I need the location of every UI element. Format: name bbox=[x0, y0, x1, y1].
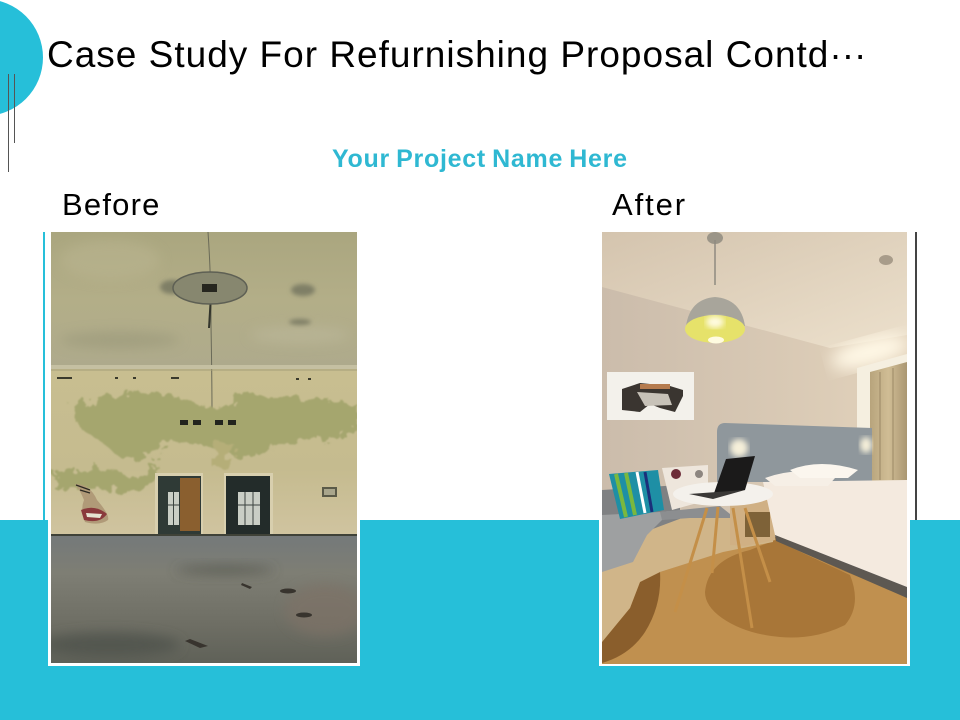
headboard bbox=[717, 423, 872, 482]
floor bbox=[602, 535, 907, 664]
side cabinet bbox=[730, 500, 775, 546]
laptop bbox=[689, 456, 755, 499]
pendant lamp bbox=[685, 232, 745, 344]
subtitle: project name: Your Project Name Here bbox=[332, 145, 628, 173]
photo: refurbished bedroom after bbox=[602, 232, 907, 664]
after photo frame bbox=[599, 520, 910, 666]
doors bbox=[155, 473, 203, 535]
before photo frame bbox=[48, 520, 360, 666]
wall plaque bbox=[322, 487, 337, 497]
wall vents bbox=[180, 420, 236, 425]
striped cushion bbox=[609, 470, 664, 519]
round table bbox=[673, 482, 773, 628]
smoke detector bbox=[879, 255, 893, 265]
photo: abandoned room before refurbishing bbox=[51, 232, 357, 663]
bed bbox=[763, 480, 907, 587]
ceiling stains bbox=[160, 280, 315, 325]
heading: after: After bbox=[612, 187, 687, 222]
ceiling cord bbox=[208, 232, 212, 415]
floor bbox=[51, 535, 357, 663]
ceiling rosette bbox=[173, 272, 247, 304]
debris bbox=[185, 583, 312, 648]
ceiling and wall bbox=[602, 232, 907, 552]
teal bottom band bbox=[0, 520, 960, 720]
wall art bbox=[607, 372, 694, 420]
title: Case Study For Refurnishing Proposal Contd··· bbox=[47, 34, 866, 75]
corner vertical lines bbox=[8, 74, 15, 172]
right dark line bbox=[915, 232, 917, 520]
pillows bbox=[765, 472, 835, 486]
left teal line bbox=[43, 232, 45, 520]
graffiti face bbox=[75, 484, 108, 524]
sofa bbox=[602, 485, 773, 642]
peeling green patches bbox=[55, 392, 357, 492]
curtain bbox=[857, 354, 907, 480]
floor shadows bbox=[705, 540, 855, 638]
white cushion bbox=[662, 465, 708, 510]
heading: before: Before bbox=[62, 187, 161, 222]
teal corner circle bbox=[0, 0, 43, 116]
cornice bbox=[51, 365, 357, 369]
